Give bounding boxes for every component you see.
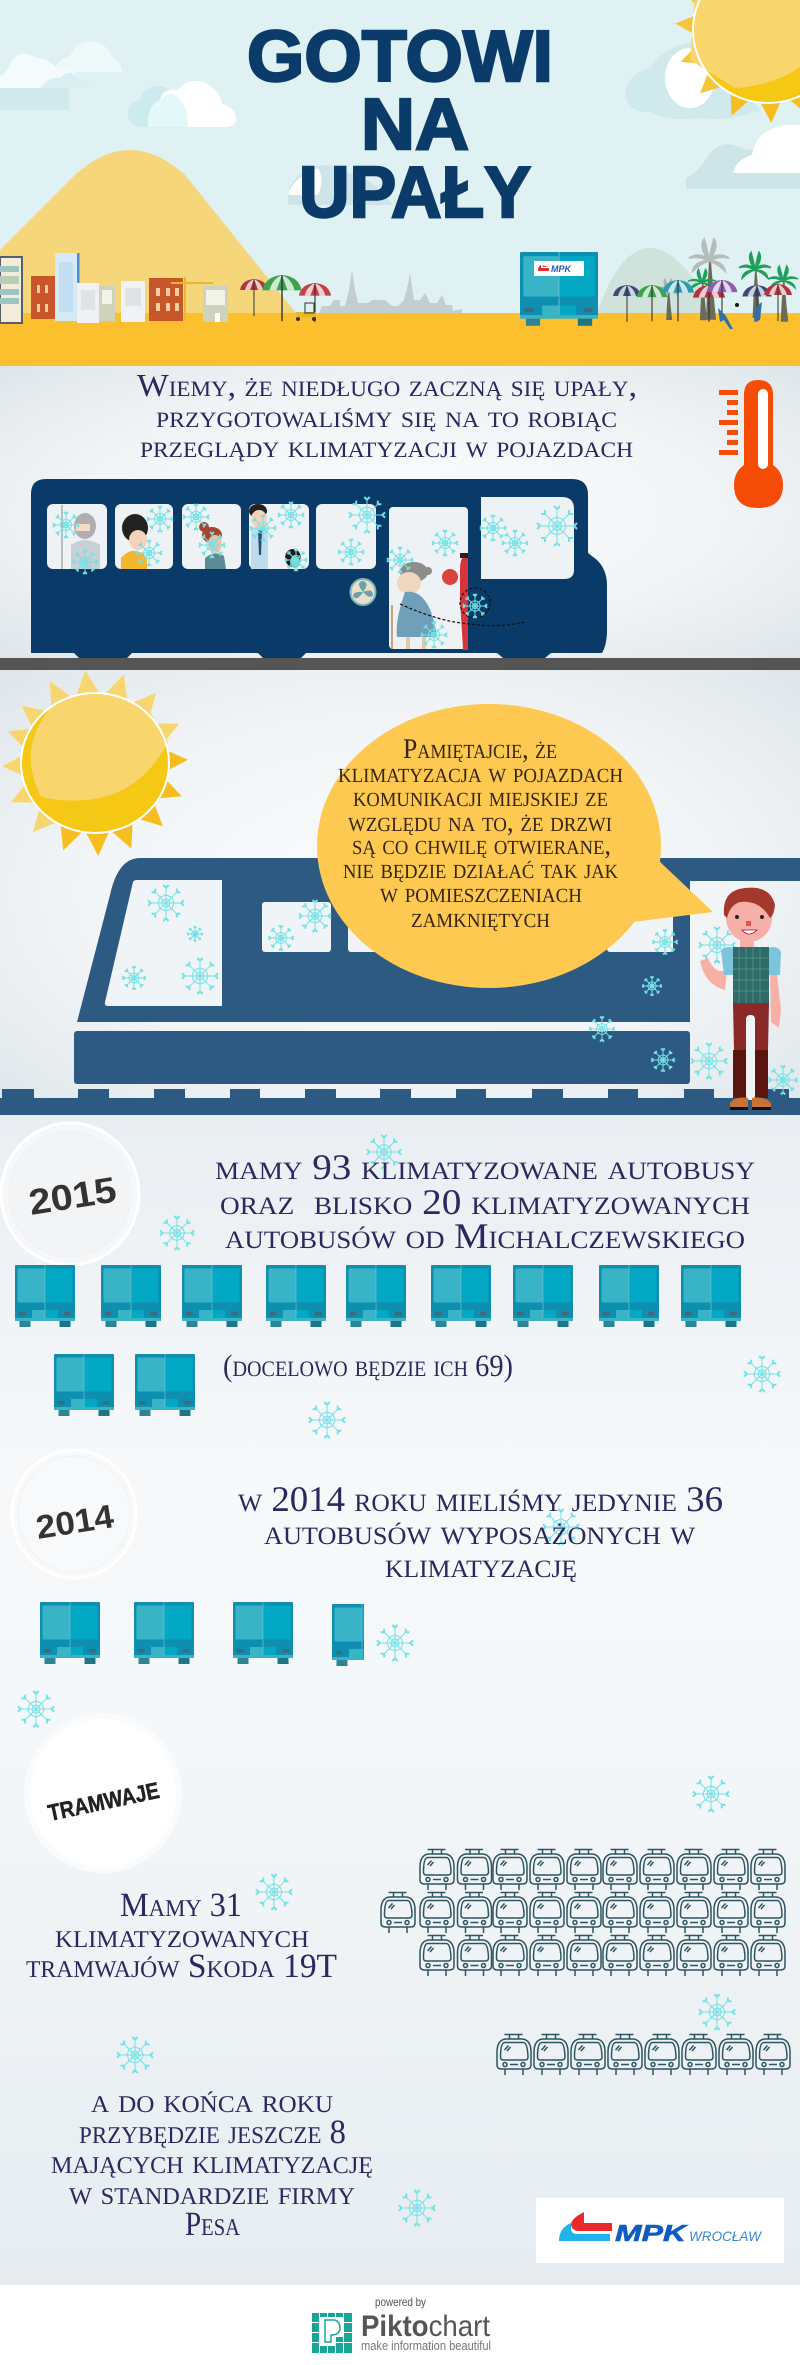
speech bubble text: nie będzie działać tak jak: [343, 854, 619, 885]
cloud: centre left: [128, 81, 236, 127]
text: trams: Mamy 31: [120, 1887, 242, 1924]
panel: footer: [0, 2285, 800, 2365]
icon: thermometer: [719, 380, 783, 508]
cloud: behind title: [288, 165, 393, 205]
buildings: [0, 253, 228, 323]
panel: footer: make information beautiful: [361, 2338, 491, 2353]
text: Pesa: mających klimatyzację: [51, 2144, 373, 2181]
badge: trams: [24, 1713, 182, 1873]
cloud: right: [686, 125, 800, 189]
text: intro: [137, 367, 637, 464]
text: Pesa: [51, 2083, 373, 2243]
text: target: (docelowo będzie ich 69): [223, 1348, 513, 1383]
palms: [656, 239, 798, 322]
passenger: woman with child: [199, 522, 226, 569]
title: NA: [361, 85, 469, 165]
bus with logo: MPK: [551, 264, 572, 274]
text: 2014: [238, 1479, 723, 1585]
speech bubble text: w pomieszczeniach: [380, 878, 582, 909]
text: 2015: autobusów od Michalczewskiego: [225, 1216, 745, 1256]
logo: MPK Wrocław: WROCŁAW: [689, 2228, 763, 2244]
speech bubble text: względu na to, że drzwi: [348, 807, 612, 838]
title: GOTOWI: [247, 17, 553, 97]
bus with logo: [520, 252, 598, 326]
panel: footer: Piktochart: [361, 2310, 491, 2343]
panel: section four background: [0, 1115, 800, 2285]
pictogram: 31 trams: [381, 1850, 785, 1976]
umbrellas: left: [240, 275, 331, 322]
platform: [0, 1089, 800, 1115]
dashed route: [400, 588, 525, 626]
speech bubble text: [338, 734, 623, 934]
text: 2014: autobusów wyposażonych w: [264, 1512, 695, 1552]
sun: top right: [674, 0, 800, 123]
pictogram: 2015 buses: [15, 1265, 741, 1416]
passenger: grandmother and red figure: [392, 553, 468, 650]
speech bubble text: są co chwilę otwierane,: [352, 830, 611, 861]
text: 2014: w 2014 roku mieliśmy jedynie 36: [238, 1479, 723, 1519]
mountain: [0, 150, 296, 313]
title: [247, 17, 553, 233]
snowflakes: 2014: [18, 1509, 579, 1727]
cloud: top left: [0, 41, 122, 110]
green hill: [597, 248, 715, 313]
cloud: behind sun: [625, 40, 760, 119]
panel: header: [0, 0, 800, 367]
text: 2015: mamy 93 klimatyzowane autobusy: [215, 1147, 755, 1187]
panel: section two background: [0, 366, 800, 658]
text: trams: klimatyzowanych: [55, 1918, 309, 1955]
text: 2015: [215, 1147, 755, 1256]
snowflakes: train section: [122, 885, 797, 1094]
badge: 2014: [12, 1450, 136, 1578]
speech bubble text: komunikacji miejskiej ze: [353, 782, 608, 813]
text: intro: przeglądy klimatyzacji w pojazdach: [140, 428, 633, 464]
passenger: man and toddler: [249, 504, 301, 569]
snowflakes: trams: [117, 1776, 735, 2226]
text: intro: Wiemy, że niedługo zaczną się upały,: [137, 367, 637, 403]
road: [0, 658, 800, 670]
logo: MPK Wrocław: [536, 2198, 784, 2263]
text: Pesa: a do końca roku: [91, 2083, 333, 2120]
badge: 2014: 2014: [33, 1497, 117, 1546]
skyline: [319, 270, 462, 313]
bus windows: [47, 497, 574, 649]
beach figures: [718, 302, 762, 329]
passenger: knight: [62, 505, 100, 569]
title: UPAŁY: [299, 153, 531, 233]
text: trams: [26, 1887, 337, 1985]
text: Pesa: Pesa: [185, 2206, 241, 2243]
train windows: [105, 880, 673, 1006]
speech bubble text: zamkniętych: [411, 903, 550, 934]
pictogram: 8 trams: [497, 2034, 790, 2075]
sun: [2, 669, 188, 856]
train: [74, 858, 800, 1084]
snowflakes: 2015: [160, 1135, 780, 1438]
icon: fan: [350, 579, 376, 605]
panel: section three background: [0, 670, 800, 1115]
text: trams: tramwajów Skoda 19T: [26, 1948, 337, 1985]
snowflakes: over window edge: [652, 927, 735, 963]
panel: footer: powered by: [375, 2295, 426, 2309]
text: intro: przygotowaliśmy się na to robiąc: [156, 398, 617, 434]
speech bubble text: klimatyzacja w pojazdach: [338, 758, 623, 789]
badge: 2015: 2015: [26, 1169, 119, 1223]
text: Pesa: przybędzie jeszcze 8: [79, 2114, 346, 2151]
logo: Piktochart: [312, 2313, 352, 2353]
speech bubble text: Pamiętajcie, że: [403, 734, 557, 765]
text: Pesa: w standardzie firmy: [69, 2175, 355, 2212]
character: man: [700, 888, 781, 1110]
snowflakes: bus section: [53, 497, 577, 648]
bus illustration: [31, 479, 607, 658]
text: 2015: oraz blisko 20 klimatyzowanych: [220, 1182, 750, 1222]
umbrellas: right: [613, 280, 792, 322]
logo: MPK Wrocław: MPK: [615, 2220, 688, 2246]
pictogram: 2014 buses: [40, 1602, 392, 1666]
badge: trams: TRAMWAJE: [46, 1777, 162, 1826]
text: 2014: klimatyzację: [385, 1545, 577, 1585]
badge: 2015: [1, 1123, 139, 1265]
forklift: [296, 303, 316, 321]
speech bubble: [317, 704, 713, 988]
ground: [0, 313, 800, 366]
passenger: boy: [121, 514, 148, 569]
